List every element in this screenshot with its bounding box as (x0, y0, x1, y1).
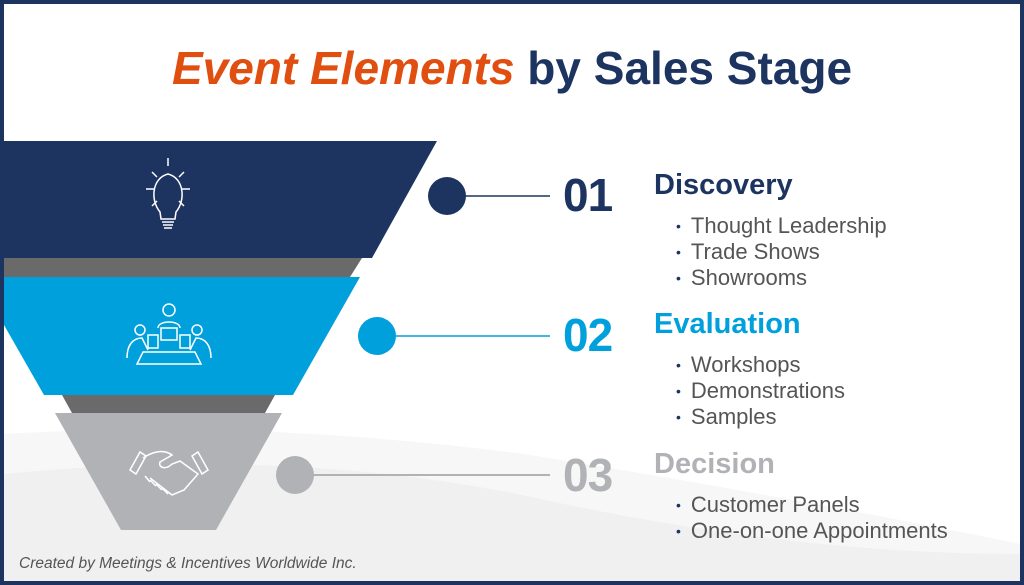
connector dots and lines (447, 195, 550, 197)
text: One-on-one Appointments (691, 518, 948, 543)
text: Discovery (654, 169, 793, 201)
funnel: decision band (55, 413, 282, 530)
text: Samples (691, 404, 776, 429)
text: Thought Leadership (691, 213, 887, 238)
stage 01: 01 (563, 169, 612, 221)
funnel: evaluation band (4, 277, 360, 395)
icon: meeting (127, 304, 211, 364)
text: Trade Shows (691, 239, 820, 264)
text: Customer Panels (691, 492, 860, 517)
credit: Created by Meetings & Incentives Worldwide Inc. (19, 555, 357, 572)
stage 03: 03 (563, 449, 612, 501)
stage 02: 02 (563, 309, 612, 361)
text: Evaluation (654, 308, 801, 340)
text: Demonstrations (691, 378, 845, 403)
title: Event Elements by Sales Stage (172, 42, 852, 94)
text: Decision (654, 448, 775, 480)
text: Workshops (691, 352, 801, 377)
text: Showrooms (691, 265, 807, 290)
funnel: discovery band (4, 141, 437, 258)
icon: lightbulb (146, 158, 190, 228)
icon: handshake (130, 452, 208, 495)
